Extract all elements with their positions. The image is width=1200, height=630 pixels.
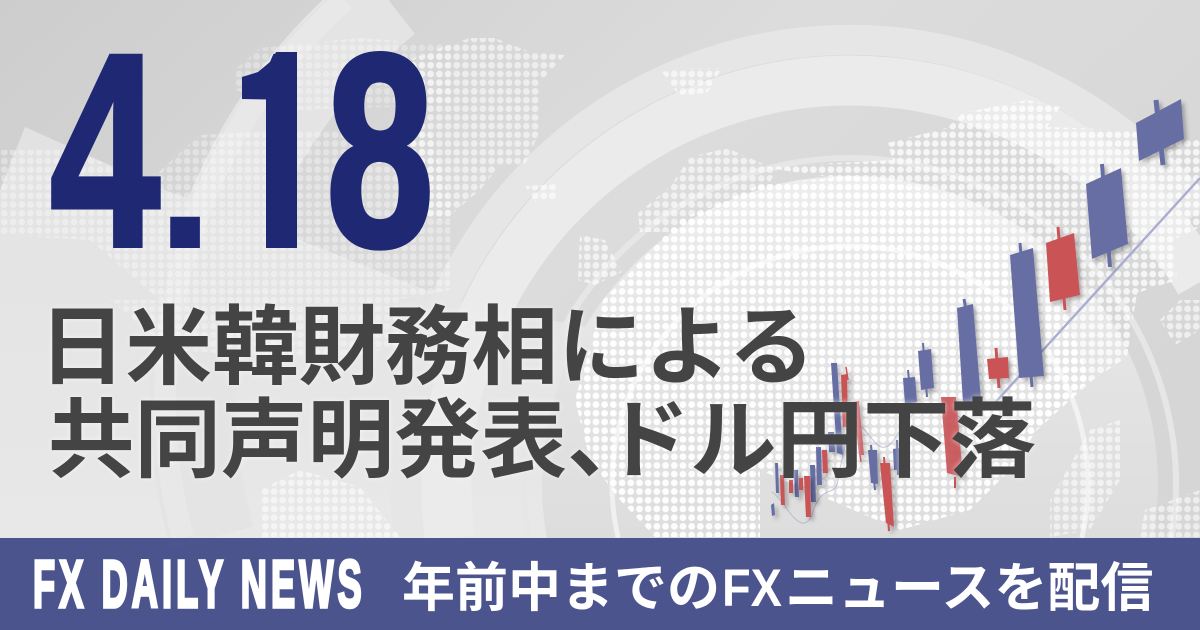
- headline line 1: 日米韓財務相による: [39, 300, 815, 396]
- headline: [39, 300, 1036, 489]
- banner subtitle: [402, 559, 1153, 618]
- banner subtitle: FX: [722, 559, 782, 618]
- date heading: 8: [326, 0, 434, 304]
- moving average curve: [772, 407, 965, 523]
- banner title: FX DAILY NEWS: [33, 547, 366, 622]
- banner subtitle: ニュースを配信: [785, 559, 1153, 618]
- date heading: 4: [50, 0, 161, 304]
- banner subtitle: 年前中までの: [402, 559, 720, 618]
- headline line 2: 共同声明発表、ドル円下落: [48, 393, 1036, 489]
- blue candles: [771, 99, 1184, 516]
- trend line: [993, 178, 1200, 405]
- red candles: [780, 227, 1080, 531]
- date heading: [51, 51, 430, 251]
- date heading: .: [156, 58, 214, 293]
- date heading: 1: [209, 0, 339, 304]
